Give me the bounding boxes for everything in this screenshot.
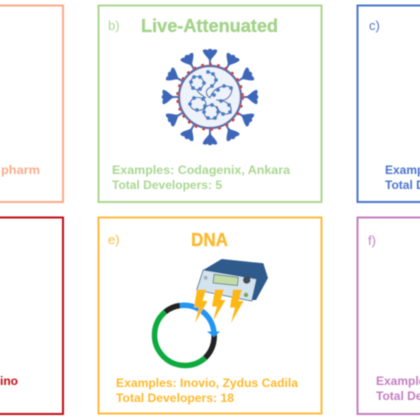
text: panel e examples and developers: Total Developers: 18 bbox=[116, 391, 234, 405]
text: panel e examples and developers bbox=[116, 376, 298, 405]
panel a: cropped orange panel bbox=[0, 6, 63, 202]
icon: lightning bolts bbox=[194, 290, 244, 323]
panel c: cropped blue panel bbox=[358, 6, 420, 202]
text: panel b examples and developers bbox=[112, 163, 290, 192]
text: panel f examples and developers bbox=[376, 374, 420, 403]
text: panel d example fragment: ino bbox=[0, 374, 18, 388]
panel letter f: f) bbox=[368, 233, 376, 248]
text: panel c examples and developers bbox=[385, 163, 420, 192]
heading: Live-Attenuated: Live-Attenuated bbox=[141, 16, 278, 36]
text: panel b examples and developers: Examples: Codagenix, Ankara bbox=[112, 163, 290, 177]
text: panel a example fragment: pharm bbox=[1, 163, 40, 177]
icon: electroporation device bbox=[197, 259, 268, 301]
panel d: cropped red panel bbox=[0, 218, 63, 414]
text: panel e examples and developers: Examples: Inovio, Zydus Cadila bbox=[116, 376, 298, 390]
icon: plasmid ring bbox=[155, 305, 220, 365]
panel e: DNA bbox=[98, 218, 322, 414]
panel letter c: c) bbox=[369, 18, 380, 33]
panel f: cropped purple panel bbox=[358, 218, 420, 414]
icon: coronavirus particle bbox=[162, 49, 258, 145]
panel letter e: e) bbox=[108, 232, 120, 247]
panel b: live-attenuated bbox=[98, 6, 322, 202]
text: panel b examples and developers: Total Developers: 5 bbox=[112, 178, 222, 192]
heading: DNA: DNA bbox=[191, 230, 228, 250]
panel letter b: b) bbox=[108, 18, 120, 33]
